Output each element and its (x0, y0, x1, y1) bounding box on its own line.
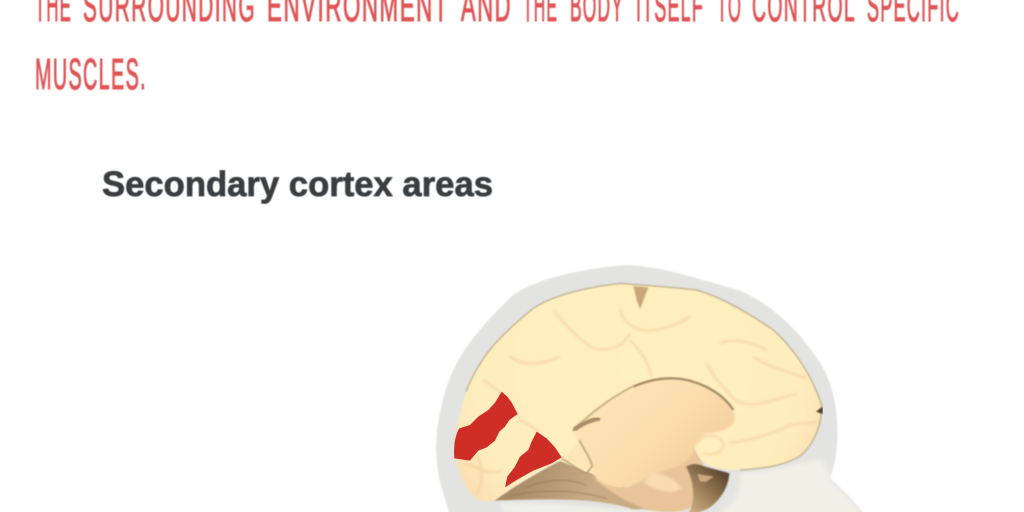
cingulate sulcus (633, 378, 733, 410)
lower head highlight (500, 503, 687, 512)
illustration: brain in head silhouette (436, 265, 865, 512)
brainstem highlight (643, 473, 682, 492)
neck highlight (713, 458, 863, 512)
midbrain dark region (686, 464, 729, 512)
central sulcus notch (633, 286, 648, 309)
limbic fold edge (562, 440, 592, 473)
limbic fold tip (562, 437, 592, 473)
callosum rear shadow (574, 418, 600, 430)
brainstem (592, 447, 703, 512)
body text: first line, cropped at top edge (35, 0, 960, 31)
highlighted secondary visual area: lower band (505, 432, 562, 487)
cerebellum folds (510, 480, 607, 498)
outer cortex edge shading (466, 283, 822, 470)
cerebrum (454, 283, 822, 501)
occipital notch (816, 407, 823, 414)
corpus callosum and thalamus (573, 379, 735, 488)
highlighted secondary visual area: upper band (454, 392, 518, 461)
cortex folds (463, 308, 817, 495)
midbrain detail (697, 474, 713, 482)
callosum dark edge (573, 386, 633, 431)
head silhouette (436, 265, 865, 512)
heading: secondary cortex areas: Secondary cortex areas (102, 165, 493, 204)
cerebellum (494, 461, 653, 509)
infographic canvas: MUSCLES. (35, 50, 147, 99)
